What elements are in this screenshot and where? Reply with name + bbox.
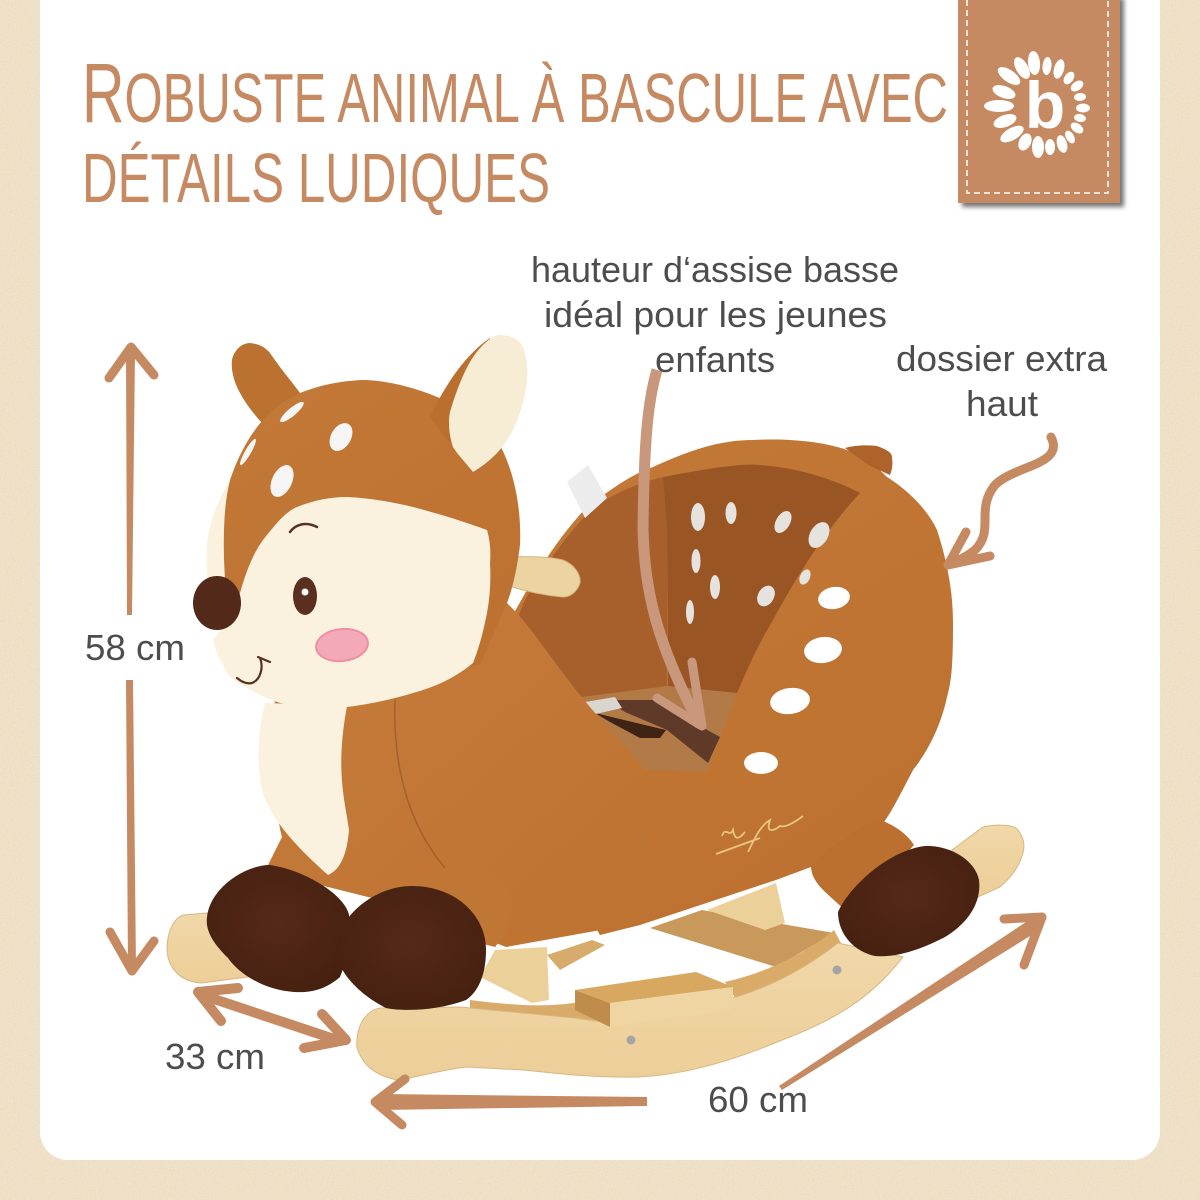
arrow: height down [110,680,154,971]
velcro tag [567,465,607,518]
nose [193,576,241,630]
chest [258,703,349,875]
forehead spots [238,399,357,501]
eyebrow [290,524,317,532]
body seam [395,700,445,868]
arrow: seat [643,370,702,726]
left ear [232,343,300,423]
rocking deer toy [167,335,1024,1080]
icon: flower logo: b [1025,68,1065,142]
annotation: high back: haut [966,383,1038,424]
tail [845,445,892,475]
seat [582,686,737,772]
arrow: depth [198,988,346,1048]
height label: 58 cm [85,627,185,668]
annotation: low seat: hauteur d‘assise basse [531,249,899,290]
wooden handle [500,557,580,597]
arrow: back [948,437,1053,565]
main rocker [357,943,903,1080]
face [213,497,490,708]
back spots [686,502,834,624]
right ear [430,335,527,472]
signature [716,816,803,854]
back shell [510,439,953,935]
eye [293,577,317,615]
wood post [480,947,549,1003]
mouth [237,657,270,683]
width label: 60 cm [708,1079,808,1120]
annotation: low seat: idéal pour les jeunes [544,294,887,335]
left cheek strip [207,480,230,610]
back leg [811,820,914,915]
front leg [403,870,512,947]
arrow: width right [779,916,1043,1090]
far rocker [167,825,1024,983]
brand tag [958,0,1120,203]
harness strap [585,697,720,763]
title: DÉTAILS LUDIQUES [82,139,550,217]
side spots [744,584,852,774]
foot rest [575,972,733,1027]
annotation: high back: dossier extra [896,338,1108,379]
title [82,46,948,217]
depth label: 33 cm [165,1036,265,1077]
icon: flower logo [984,51,1090,158]
back foot [838,846,979,956]
annotation: low seat [531,249,899,380]
seat back panel [663,465,860,693]
front foot [336,886,486,1010]
arrow: height up [109,347,154,615]
screws [626,966,842,1044]
annotation: low seat: enfants [655,339,775,380]
front body [268,603,649,947]
head [223,380,520,690]
annotation: high back [896,338,1108,424]
left foot [207,865,349,992]
rocker inner rim [470,930,842,1025]
seat left wall [515,477,667,697]
cheek [314,626,370,664]
arrow: width left [375,1079,647,1125]
